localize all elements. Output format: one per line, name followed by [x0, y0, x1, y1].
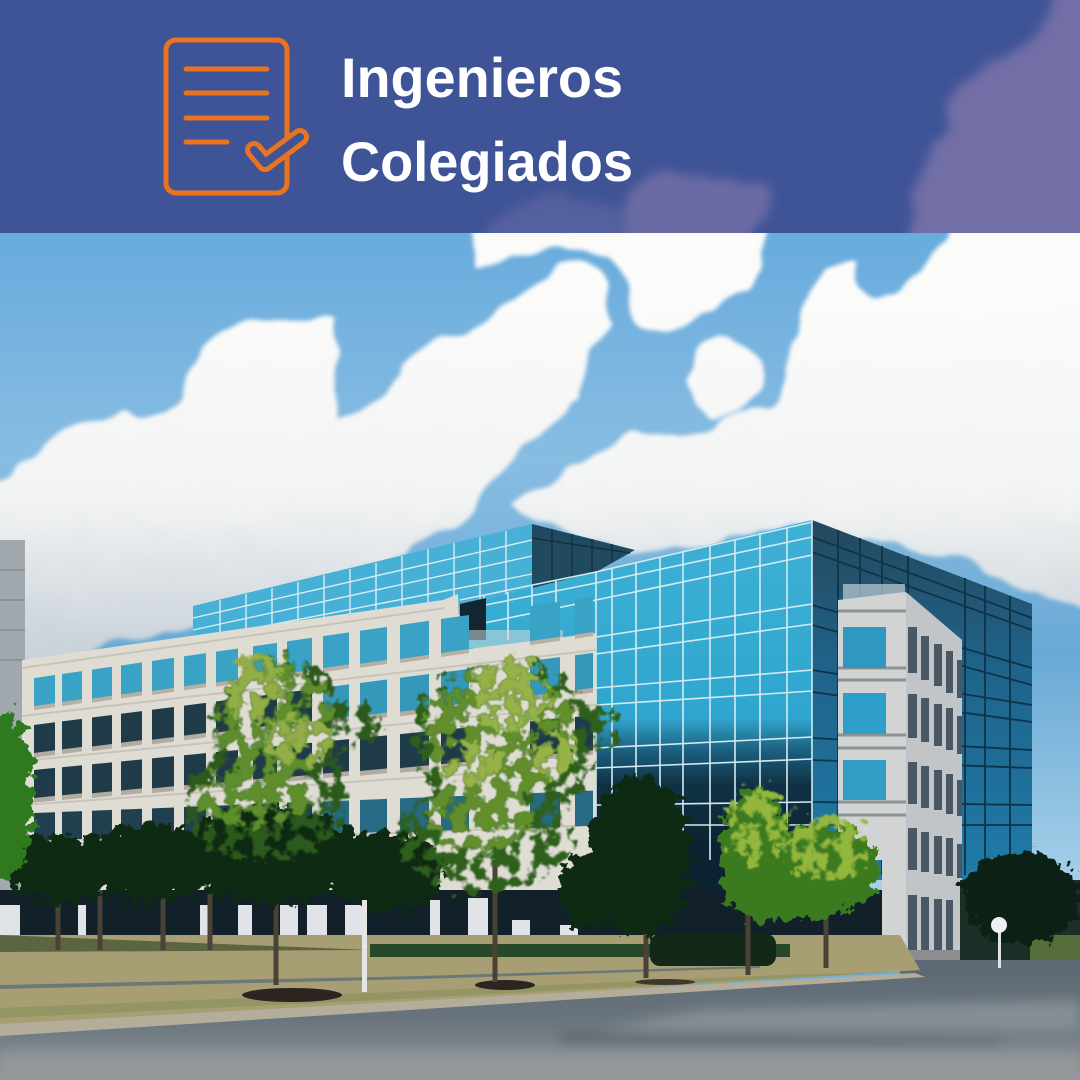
building: white corner tower — [838, 584, 962, 966]
icon: checklist document with checkmark — [166, 40, 300, 193]
building: upper glass setback — [193, 524, 635, 640]
banner cloud tint — [484, 0, 1080, 233]
title: Colegiados — [341, 130, 633, 193]
road — [0, 968, 1080, 1080]
road sign — [991, 917, 1007, 968]
dark tree row — [2, 775, 692, 935]
dark tree right — [964, 851, 1080, 943]
hedge — [650, 934, 776, 966]
header banner — [0, 0, 1080, 233]
trunks — [58, 860, 826, 985]
tree 4 — [719, 789, 881, 921]
tree 1 — [185, 658, 380, 863]
left tree — [0, 711, 34, 879]
building: glass facade front — [445, 520, 812, 900]
tree 2 — [399, 660, 620, 893]
clouds — [0, 225, 1080, 670]
building: ground floor — [0, 890, 960, 955]
title — [341, 46, 633, 193]
trees — [0, 654, 1080, 985]
title: Ingenieros — [341, 46, 623, 109]
lawn — [0, 935, 920, 1030]
far right lot — [900, 880, 1080, 990]
building: white concrete wing — [22, 594, 596, 905]
lamp post — [362, 900, 367, 992]
building: glass facade side — [812, 520, 1032, 880]
left tower — [0, 540, 25, 910]
